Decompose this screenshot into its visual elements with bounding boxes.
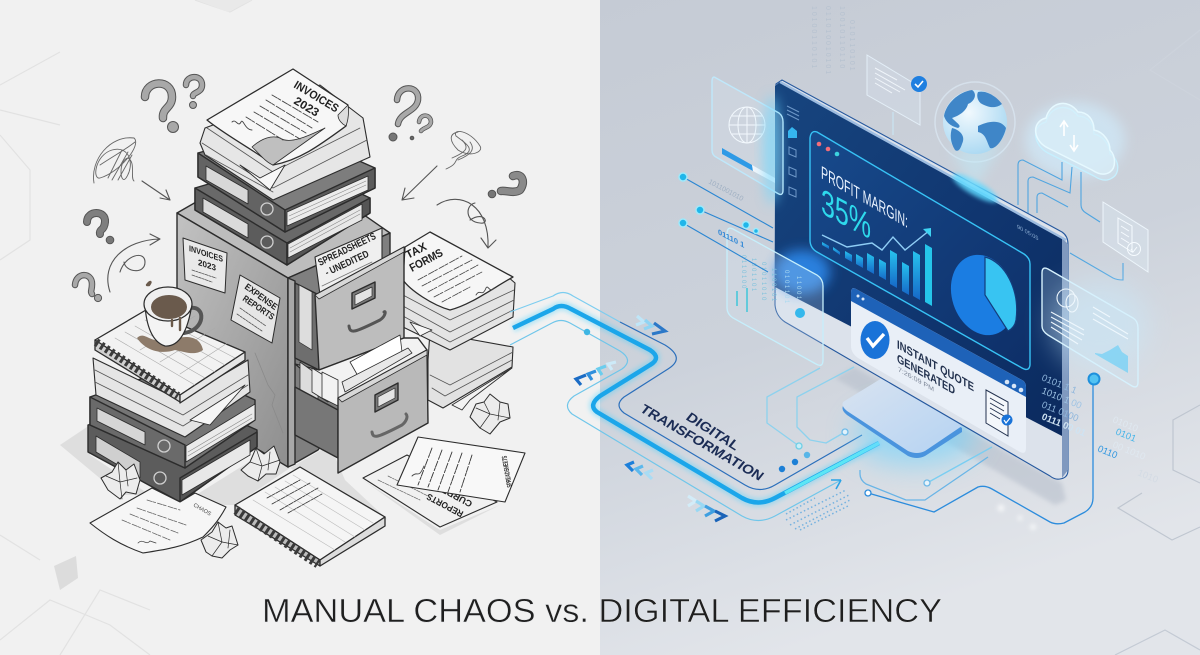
binary column decoration [707,6,855,203]
35% figure: 35% [821,181,871,248]
bar chart [822,242,932,306]
scribble left [93,138,136,183]
sticky note: expense reports [231,275,280,343]
sticky note: expense reports: REPORTS [241,293,276,322]
floating glass panel: left binary: 1 1 0 0 1 [795,276,801,300]
binary code bottom right [1040,373,1160,486]
sticky note: invoices 2023 [183,238,227,293]
papers on floor: right: REPORTS [425,491,465,519]
paper on floor: left: CHAOS [192,503,212,518]
dot grid [786,490,850,530]
binary column decoration: 1011001010 [707,179,744,203]
glass panel glow [763,95,781,205]
floating glass panel: left binary: 0 1 0 1 1 0 1 0 [760,262,766,301]
instant quote popup: GENERATED [897,351,955,398]
pie chart [941,246,1025,344]
binary column decoration: 1 0 0 1 0 1 1 0 1 1 0 [838,6,845,68]
monitor shadow on surface [835,367,1066,505]
filing cabinet [177,155,390,467]
top paper: invoices 2023: 2023 [291,95,321,119]
lower open drawer with files [295,335,428,473]
spreadsheets paper in drawer: SPREADSHEETS [316,231,378,269]
binary code bottom right: 1010 1 00 [1040,386,1083,412]
floating glass panel: headset and chart [1042,268,1148,387]
pipeline inner line [510,320,841,520]
sparkles on surface [998,504,1036,530]
node above circuit [1088,374,1100,384]
right paper pile upper [403,270,515,350]
connector pipeline: digital transformation path [510,292,879,520]
chevrons along pipeline [576,316,725,521]
top paper: tax forms: FORMS [408,247,445,275]
coffee cup [144,282,201,346]
top paper: tax forms [403,232,513,310]
question marks [75,77,523,302]
profit margin label: PROFIT MARGIN: [821,162,908,233]
title: MANUAL CHAOS vs. DIGITAL EFFICIENCY [262,592,942,629]
monitor body [774,80,1068,479]
sticky note: invoices 2023: 2023 [198,257,216,273]
binary code bottom right: 0111 00 01 [1040,412,1088,439]
spreadsheets paper in drawer [315,228,382,295]
floating glass panel: left binary: 1 1 0 0 1 0 1 [770,268,776,302]
notebook stack: papers [93,358,250,437]
sidebar icons [787,106,799,197]
binary code bottom right: 011 0100 [1040,400,1080,424]
floating glass panel: document with check [867,55,927,135]
scribble right [446,131,481,169]
lower binder [195,160,370,265]
instant quote text: INSTANT QUOTE [897,337,974,395]
sticky note: invoices 2023: INVOICES [189,243,223,264]
sticky note: expense reports: EXPENSE [243,282,279,312]
cabinet crack [255,353,283,433]
floating glass panel: left binary: 01110 1 [718,227,745,250]
small status text: 90 05:05 [1017,224,1039,243]
instant quote popup [851,288,1026,453]
pipeline main glowing line [513,306,879,502]
label: digital transformation: DIGITAL [683,410,743,453]
papers on floor: right: CURRENT [428,478,474,509]
paper on floor: left [90,488,226,553]
instant quote popup: 7:26:09 PM [898,366,934,394]
floating glass panel: left binary: 0 1 1 0 1 0 0 [740,255,746,289]
binder stack on cabinet [195,128,375,265]
background: left half [0,0,600,655]
floating glass panel: checklist document [1103,202,1148,272]
binary code bottom right: 00 1010 [1111,440,1147,463]
binary code bottom right: 1010 [1136,468,1160,486]
papers on floor: right: SPREADSHEETS [501,455,514,488]
monitor screen [775,82,1062,436]
floating glass panel: globe wireframe [712,77,783,194]
dashboard inner panel [810,132,1039,369]
upper open drawer [295,247,404,370]
binary code bottom right: 01010 [1111,415,1139,435]
paper stack on binders [200,85,370,200]
cloud circuit traces [1018,160,1123,280]
right illustration: digital efficiency [510,6,1160,530]
left illustration: manual chaos [60,69,525,566]
binary code bottom right: 0101 1 1 [1040,373,1078,397]
chaos arrows [108,166,496,292]
binary column decoration: 0 1 0 1 1 0 1 0 1 [848,20,855,71]
floating glass panel: left binary: 1 0 0 1 1 0 1 [750,258,756,292]
check badge [860,321,890,359]
monitor stand [842,375,977,465]
circuit traces below monitor [767,367,1093,524]
papers on floor: right [363,437,525,527]
upper binder [198,128,375,232]
pipeline outer line [510,292,620,322]
cloud with up and down arrows [1025,102,1125,180]
right paper pile lower [428,332,513,410]
screen glow top edge [949,169,1001,207]
binary code bottom right: 0101 [1114,427,1138,445]
spreadsheets paper in drawer: - UNEDITED [324,249,371,279]
dots near label [779,452,810,472]
floor shadows [60,425,500,535]
top notebook with coffee stain [95,310,245,403]
document icon [986,390,1012,436]
floating glass panel: left binary: 0 1 0 1 1 0 1 [783,270,789,304]
spiral notebook on floor [235,467,385,566]
label: digital transformation: TRANSFORMATION [637,402,767,483]
top paper: invoices 2023 [207,69,348,165]
top paper: invoices 2023: INVOICES [291,79,341,115]
binary code bottom right: 0110 [1096,444,1119,461]
background: right half [600,0,1200,655]
circuit lines with nodes: left [679,173,773,272]
crumpled paper balls [101,394,510,558]
trend line arrow [822,230,930,250]
floating glass panel: left binary [718,227,823,365]
binary column decoration: 0 1 1 0 1 0 0 1 0 1 0 1 [824,6,831,74]
binary column decoration: 1 0 1 0 0 1 1 0 1 0 1 [810,6,817,68]
notebook stack: binders [88,365,257,502]
top paper: tax forms: TAX [404,241,429,262]
screen glow at panel corner [774,250,830,294]
globe [935,82,1015,188]
